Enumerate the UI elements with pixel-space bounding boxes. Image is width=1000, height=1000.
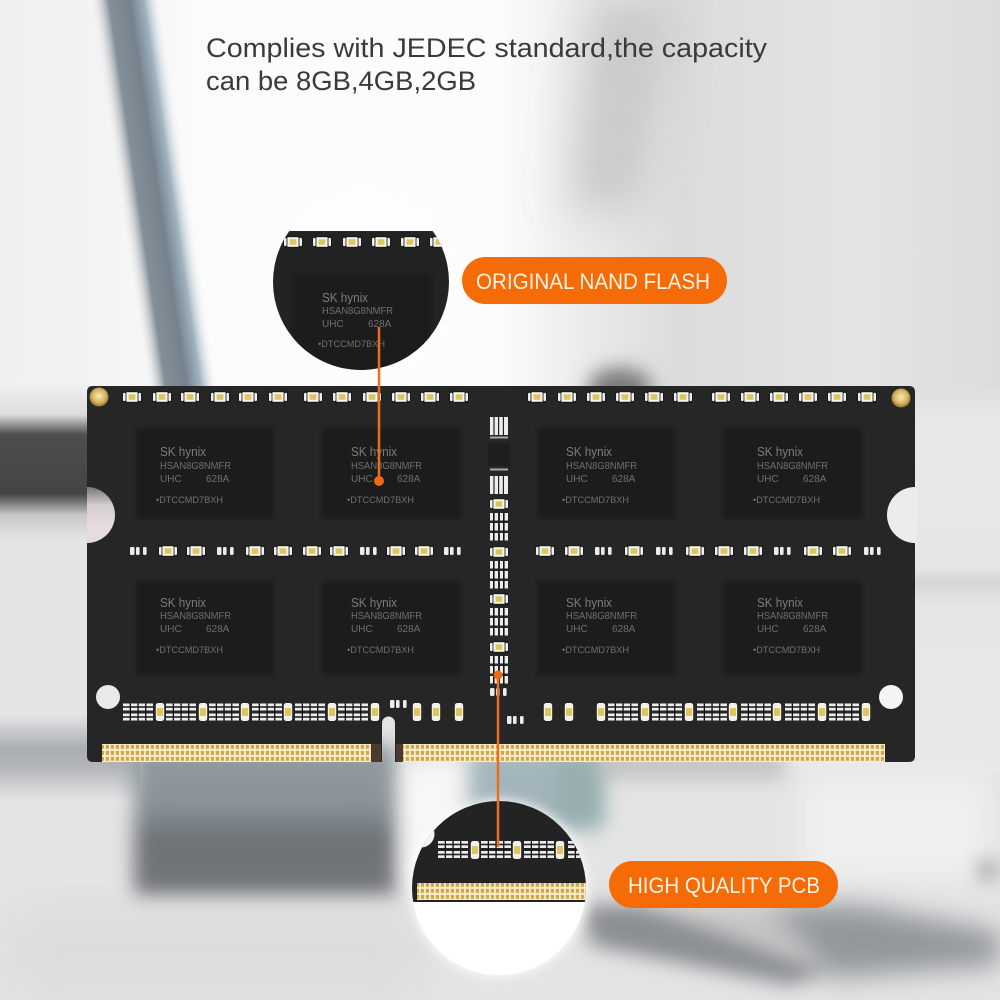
label: high quality PCB [609,861,838,908]
memory chip top 3: HSAN8G8NMFR [566,461,637,472]
memory chip top 1: HSAN8G8NMFR [160,461,231,472]
memory chip bottom 1: HSAN8G8NMFR [160,611,231,622]
memory chip bottom 4: •DTCCMD7BXH [753,645,820,655]
label: original NAND flash [462,257,727,304]
memory chip top 3: UHC [566,474,588,485]
mounting hole right [879,685,903,709]
bottom row resistor arrays [123,700,870,724]
memory chip bottom 4: SK hynix [757,595,803,610]
gold edge connector right [403,744,885,762]
memory chip bottom 3 [537,581,675,675]
memory chip bottom 3: HSAN8G8NMFR [566,611,637,622]
memory chip top 1: UHC [160,474,182,485]
memory chip bottom 4 [723,581,862,675]
memory chip bottom 2: SK hynix [351,595,397,610]
gold edge connector left [102,744,371,762]
memory chip top 1 [136,428,274,519]
memory chip top 1: 628A [206,474,230,485]
memory chip bottom 4: UHC [757,624,779,635]
memory chip bottom 2: HSAN8G8NMFR [351,611,422,622]
memory chip top 2: UHC [351,474,373,485]
memory chip top 4: SK hynix [757,444,803,459]
memory chip bottom 1 [136,581,274,675]
callout: magnified NAND flash chip: •DTCCMD7BXH [318,339,385,349]
memory chip top 1: •DTCCMD7BXH [156,495,223,505]
memory chip top 1: SK hynix [160,444,206,459]
gold mounting screw left [90,388,108,406]
memory chip bottom 3: 628A [612,624,636,635]
memory chip bottom 1: •DTCCMD7BXH [156,645,223,655]
memory chip top 4: •DTCCMD7BXH [753,495,820,505]
top row capacitors [122,392,876,402]
memory module board [87,386,915,762]
memory chip top 2 [322,428,461,519]
memory chip top 4: UHC [757,474,779,485]
memory chip bottom 4: HSAN8G8NMFR [757,611,828,622]
centre vertical component column [488,417,510,696]
memory chip bottom 1: SK hynix [160,595,206,610]
memory chip top 4 [723,428,862,519]
memory chip top 2: HSAN8G8NMFR [351,461,422,472]
memory chip top 4: 628A [803,474,827,485]
memory chip top 2: SK hynix [351,444,397,459]
memory chip bottom 2 [322,581,461,675]
memory chip bottom 3: •DTCCMD7BXH [562,645,629,655]
leader line: PCB [494,670,502,847]
memory chip top 4: HSAN8G8NMFR [757,461,828,472]
mounting hole left [96,685,120,709]
gold mounting screw right [892,388,910,408]
memory chip top 2: 628A [397,474,421,485]
memory chip top 3: •DTCCMD7BXH [562,495,629,505]
heading text: Complies with JEDEC standard,the capacity [206,33,768,63]
memory chip top 2: •DTCCMD7BXH [347,495,414,505]
memory chip bottom 4: 628A [803,624,827,635]
callout: magnified NAND flash chip [273,231,449,370]
heading text [206,33,768,96]
leader line: NAND flash [374,327,384,486]
memory chip bottom 2: UHC [351,624,373,635]
heading text: can be 8GB,4GB,2GB [206,66,476,96]
callout: magnified NAND flash chip: SK hynix [322,290,368,305]
memory chip top 3: 628A [612,474,636,485]
middle row components [130,546,881,556]
memory chip top 3 [537,428,675,519]
memory chip bottom 2: •DTCCMD7BXH [347,645,414,655]
memory chip bottom 1: 628A [206,624,230,635]
callout: magnified PCB edge [405,795,598,976]
memory chip top 3: SK hynix [566,444,612,459]
memory chip bottom 2: 628A [397,624,421,635]
label: original NAND flash: ORIGINAL NAND FLASH [476,269,710,294]
memory chip bottom 1: UHC [160,624,182,635]
callout: magnified NAND flash chip: UHC [322,319,344,330]
label: high quality PCB: HIGH QUALITY PCB [628,873,820,898]
callout: magnified NAND flash chip: HSAN8G8NMFR [322,306,393,317]
memory chip bottom 3: SK hynix [566,595,612,610]
callout: magnified NAND flash chip: 628A [368,319,392,330]
memory chip bottom 3: UHC [566,624,588,635]
